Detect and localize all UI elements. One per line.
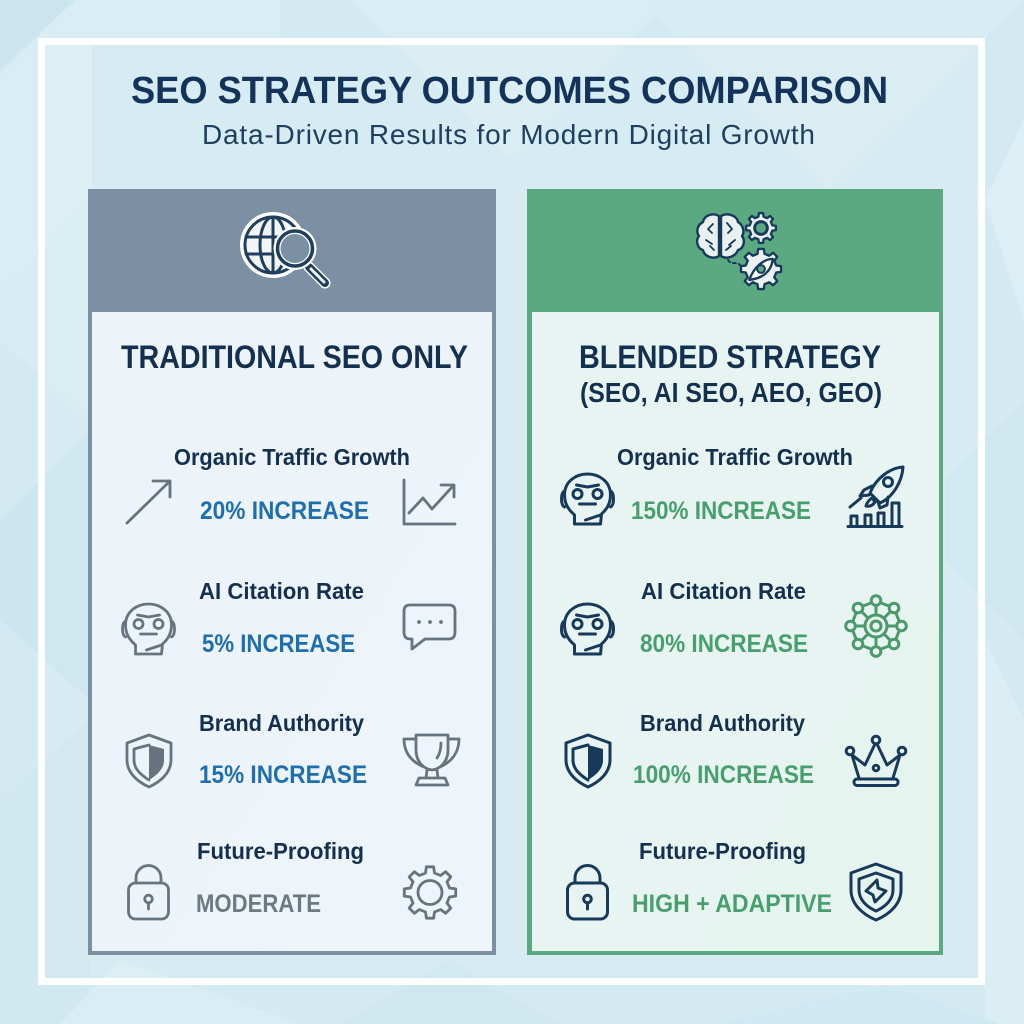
icon: crown [846, 736, 906, 786]
icon: padlock [568, 866, 608, 919]
metric label: future-proofing: Future-Proofing [639, 838, 806, 864]
icon: robot head [122, 604, 174, 654]
metric label: brand authority: Brand Authority [640, 710, 805, 736]
icon: speech bubble [404, 605, 455, 649]
value: high + adaptive: HIGH + ADAPTIVE [632, 890, 832, 918]
icon: half-filled shield [566, 735, 610, 787]
metric label: AI citation rate: AI Citation Rate [199, 578, 364, 604]
subheading: channels: (SEO, AI SEO, AEO, GEO) [580, 377, 882, 408]
heading: traditional SEO only: TRADITIONAL SEO ONLY [121, 339, 468, 375]
metric label: organic traffic growth: Organic Traffic Growth [174, 444, 410, 470]
icon: line chart [404, 480, 455, 524]
icon: globe with magnifier [242, 214, 325, 283]
panel frame and header band [88, 189, 496, 955]
icon: robot head [562, 604, 614, 654]
panel frame and header band [527, 189, 943, 955]
panel: traditional SEO only [88, 189, 496, 955]
value: moderate: MODERATE [196, 890, 321, 918]
metric label: future-proofing: Future-Proofing [197, 838, 364, 864]
subtitle: Data-Driven Results for Modern Digital Growth [202, 119, 815, 150]
value: 5% increase: 5% INCREASE [202, 630, 355, 658]
icon: shield with bolt [851, 864, 901, 920]
icon: half-filled shield [127, 735, 171, 787]
icon: brain, gears and eye [697, 213, 781, 289]
value: 15% increase: 15% INCREASE [199, 761, 367, 789]
icon: network hub [846, 596, 906, 656]
icon: padlock [128, 866, 168, 919]
value: 100% increase: 100% INCREASE [633, 761, 814, 789]
icon: robot head [562, 474, 614, 524]
value: 80% increase: 80% INCREASE [640, 630, 808, 658]
panel body [92, 312, 492, 951]
panel body [532, 312, 939, 951]
icon: up arrow [127, 481, 170, 523]
icon: rocket over bars [848, 467, 903, 526]
metric label: AI citation rate: AI Citation Rate [641, 578, 806, 604]
icon: gear [404, 867, 456, 918]
metric label: organic traffic growth: Organic Traffic Growth [617, 444, 853, 470]
panel: blended strategy [527, 189, 943, 955]
title: SEO STRATEGY OUTCOMES COMPARISON [131, 70, 888, 112]
heading: blended strategy: BLENDED STRATEGY [579, 339, 881, 375]
value: 150% increase: 150% INCREASE [631, 497, 811, 525]
icon: trophy [404, 735, 459, 785]
value: 20% increase: 20% INCREASE [200, 497, 369, 525]
metric label: brand authority: Brand Authority [199, 710, 364, 736]
